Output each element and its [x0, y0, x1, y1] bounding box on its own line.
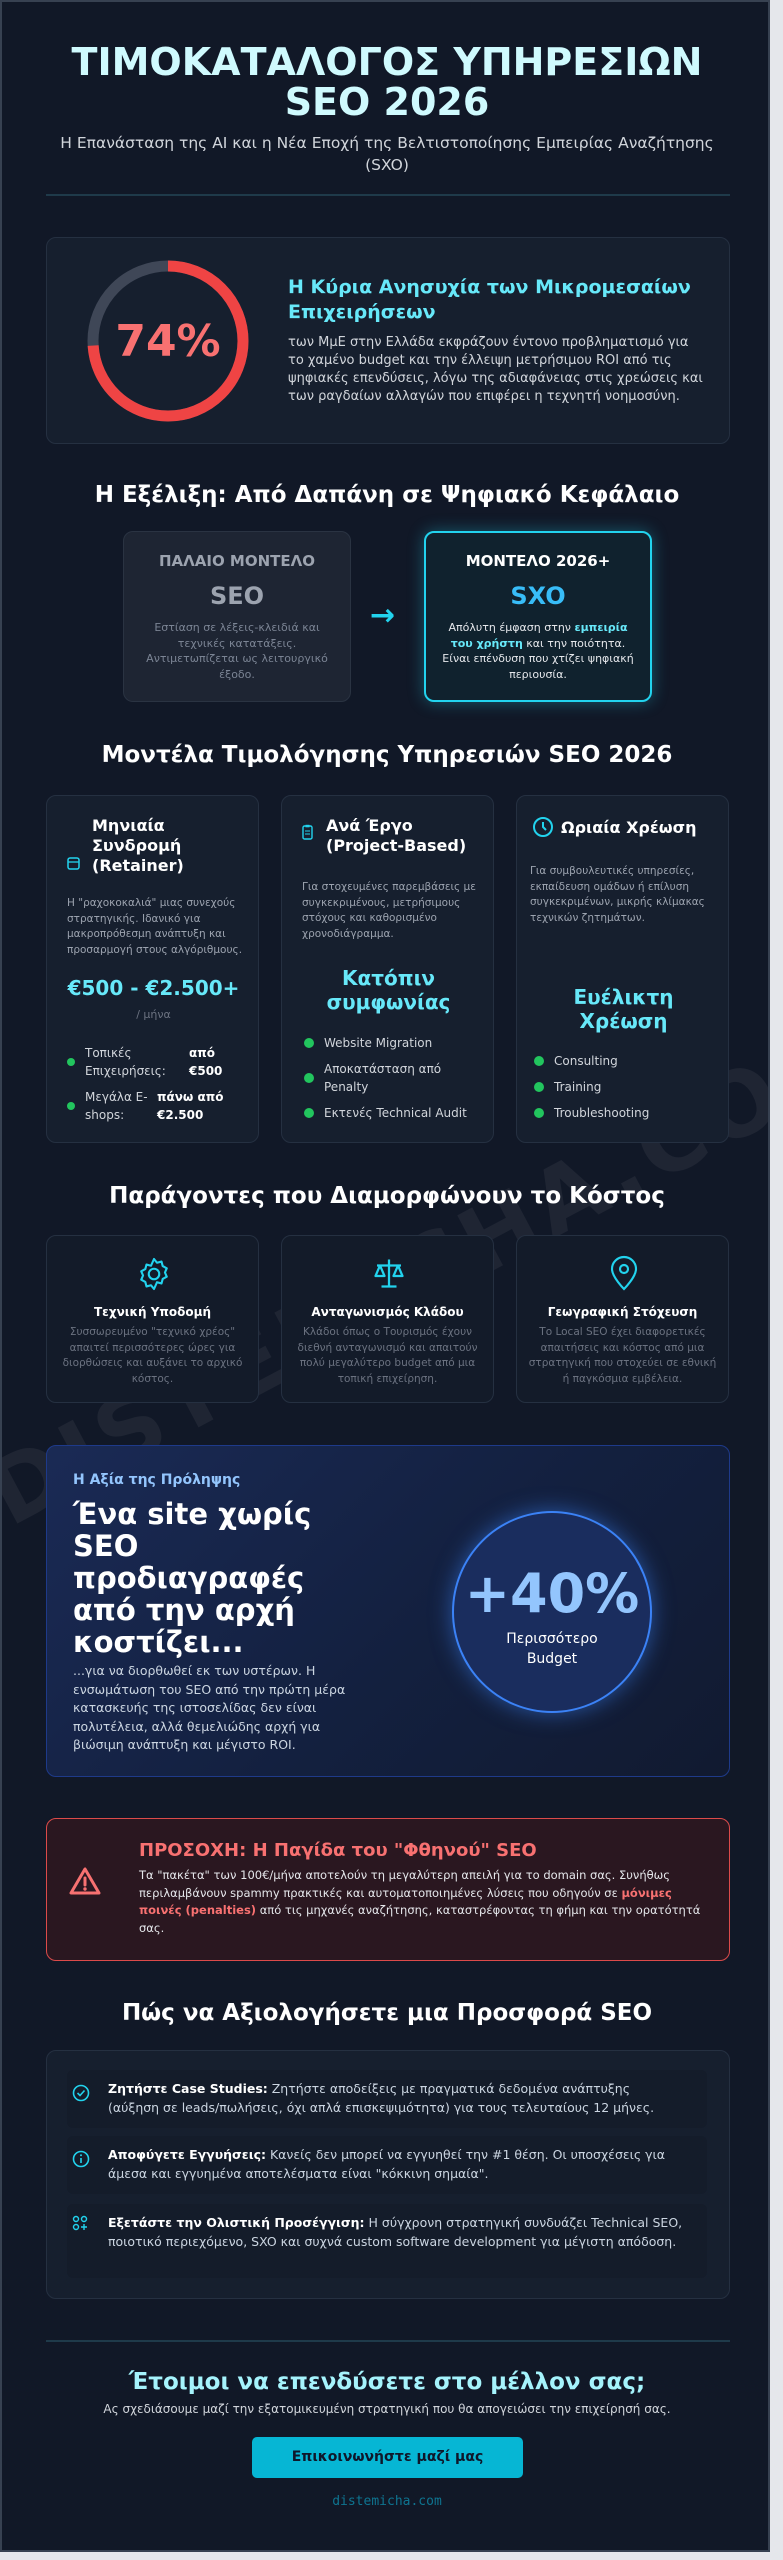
panel: project based: Κατόπιν	[342, 966, 435, 990]
panel: retainer: Μηνιαία	[92, 816, 165, 835]
panel: retainer: Μεγάλα E-shops:	[85, 1090, 148, 1122]
panel: warning	[46, 1818, 730, 1961]
panel: competition: Κλάδοι όπως ο Τουρισμός έχουν διεθνή ανταγωνισμό και απαιτούν πολύ μεγαλύτερο budget από μια τοπική επιχείρηση.	[298, 1326, 477, 1384]
panel: hourly: Ωριαία Χρέωση	[561, 818, 697, 837]
headline: Ένα site χωρίς SEO προδιαγραφές από την αρχή κοστίζει...	[73, 1497, 311, 1659]
panel: retainer: από	[189, 1046, 215, 1060]
panel: project based: συμφωνίας	[327, 990, 450, 1014]
panel: technical infrastructure: Συσσωρευμένο "τεχνικό χρέος" απαιτεί περισσότερες ώρες για διορθώσεις και αυξάνει το αρχικό κόστος.	[63, 1326, 242, 1384]
item: case studies: Ζητήστε Case Studies: Ζητήστε αποδείξεις με πραγματικά δεδομένα ανάπτυξης (αύξηση σε leads/πωλήσεις, όχι απλά επισκεψιμότητα) για τους τελευταίους 12 μήνες.	[108, 2081, 654, 2114]
heading: cost factors: Παράγοντες που Διαμορφώνουν το Κόστος	[109, 1183, 665, 1209]
text block: ...για να διορθωθεί εκ των υστέρων. Η ενσωμάτωση του SEO από την πρώτη μέρα κατασκευής της ιστοσελίδας δεν είναι πολυτέλεια, αλλά θεμελιώδης αρχή για βιώσιμη ανάπτυξη και μέγιστο ROI.	[73, 1663, 345, 1752]
panel: old model: Εστίαση σε λέξεις-κλειδιά και τεχνικές κατατάξεις. Αντιμετωπίζεται ως λειτουργικό έξοδο.	[146, 621, 328, 680]
label: Η Αξία της Πρόληψης	[73, 1472, 240, 1488]
panel: project based: Penalty	[324, 1080, 368, 1094]
icon: scales	[374, 1260, 404, 1288]
panel: project based: Ανά Έργο	[326, 816, 413, 835]
item: guarantees	[67, 2136, 707, 2194]
title: ΤΙΜΟΚΑΤΑΛΟΓΟΣ ΥΠΗΡΕΣΙΩΝ	[72, 40, 702, 84]
panel: project based: Αποκατάσταση από	[324, 1062, 441, 1076]
callout: +40% circle: Περισσότερο	[506, 1631, 598, 1647]
panel: evaluation checklist	[46, 2050, 730, 2299]
panel: project based: Website Migration	[324, 1036, 432, 1050]
panel: new model: ΜΟΝΤΕΛΟ 2026+	[466, 552, 610, 570]
item: holistic approach	[67, 2204, 707, 2278]
panel: retainer	[46, 795, 259, 1143]
panel: retainer: €2.500	[157, 1108, 203, 1122]
icon: warning triangle	[69, 1867, 100, 1894]
panel: geography	[516, 1235, 729, 1403]
panel: project based	[281, 795, 494, 1143]
subtitle: Η Επανάσταση της AI και η Νέα Εποχή της Βελτιστοποίησης Εμπειρίας Αναζήτησης (SXO)	[60, 134, 714, 174]
panel: competition	[281, 1235, 494, 1403]
icon: calendar	[67, 857, 80, 870]
title	[72, 40, 702, 124]
panel: warning: Τα "πακέτα" των 100€/μήνα αποτελούν τη μεγαλύτερη απειλή για το domain σας. Συνήθως περιλαμβάνουν spammy πρακτικές και αυτοματοποιημένες λύσεις που οδηγούν σε μόνιμες ποινές (penalties) από τις μηχανές αναζήτησης, καταστρέφοντας τη φήμη και την ορατότητά σας.	[139, 1868, 700, 1934]
icon: gear	[140, 1258, 168, 1290]
panel: hourly: Troubleshooting	[554, 1106, 649, 1120]
panel: new model: Απόλυτη έμφαση στην εμπειρία του χρήστη και την ποιότητα. Είναι επένδυση που χτίζει ψηφιακή περιουσία.	[442, 621, 634, 680]
chart: donut 74%	[88, 260, 248, 422]
panel: retainer: Τοπικές Επιχειρήσεις:	[85, 1046, 166, 1078]
panel: retainer: / μήνα	[136, 1008, 171, 1021]
panel: retainer: Συνδρομή	[92, 836, 181, 855]
panel: hourly: Ευέλικτη	[574, 985, 673, 1009]
panel: new model: SXO	[510, 582, 566, 610]
panel: old model	[123, 531, 351, 702]
panel: new model	[424, 531, 652, 702]
item: holistic approach: Εξετάστε την Ολιστική Προσέγγιση: Η σύγχρονη στρατηγική συνδυάζει Technical SEO, ποιοτικό περιεχόμενο, SXO και συχνά custom software development για μέγιστη απόδοση.	[108, 2215, 682, 2248]
CTA button	[252, 2437, 523, 2478]
panel: technical infrastructure: Τεχνική Υποδομή	[94, 1305, 211, 1319]
icon: clipboard	[302, 824, 313, 840]
panel: retainer: €500 - €2.500+	[68, 976, 239, 1000]
panel: project based: Εκτενές Technical Audit	[324, 1106, 467, 1120]
panel: old model: ΠΑΛΑΙΟ ΜΟΝΤΕΛΟ	[159, 552, 315, 570]
panel: prevention value	[46, 1445, 730, 1777]
panel: project based: Για στοχευμένες παρεμβάσεις με συγκεκριμένους, μετρήσιμους στόχους και καθορισμένο χρονοδιάγραμμα.	[302, 881, 476, 940]
panel: retainer: (Retainer)	[92, 856, 184, 875]
panel: hourly: Για συμβουλευτικές υπηρεσίες, εκπαίδευση ομάδων ή επίλυση συγκεκριμένων, μικρής κλίμακας τεχνικών ζητημάτων.	[530, 865, 705, 924]
heading: how to evaluate: Πώς να Αξιολογήσετε μια Προσφορά SEO	[122, 2000, 652, 2026]
panel: competition: Ανταγωνισμός Κλάδου	[311, 1305, 464, 1319]
text block: των ΜμΕ στην Ελλάδα εκφράζουν έντονο προβληματισμό για το χαμένο budget και την έλλειψη μετρήσιμου ROI από τις ψηφιακές επενδύσεις, λόγω της αδιαφάνειας στις χρεώσεις και των ραγδαίων αλλαγών που επιφέρει η τεχνητή νοημοσύνη.	[288, 335, 703, 404]
panel: warning: ΠΡΟΣΟΧΗ: Η Παγίδα του "Φθηνού" SEO	[139, 1840, 537, 1861]
icon: clock	[533, 817, 553, 837]
panel: 74% statistic	[46, 237, 730, 444]
CTA heading: Έτοιμοι να επενδύσετε στο μέλλον σας;	[129, 2369, 645, 2395]
callout: +40% circle: Budget	[527, 1651, 577, 1667]
panel: old model: SEO	[210, 582, 264, 610]
chart: donut 74%: 74%	[115, 316, 221, 367]
title: SEO 2026	[285, 80, 489, 124]
panel: geography: Γεωγραφική Στόχευση	[548, 1305, 697, 1319]
CTA text: Ας σχεδιάσουμε μαζί την εξατομικευμένη στρατηγική που θα απογειώσει την επιχείρησή σας.	[103, 2402, 671, 2416]
callout: +40% circle	[452, 1511, 652, 1713]
panel: hourly	[516, 795, 729, 1143]
panel: hourly: Training	[554, 1080, 601, 1094]
panel: hourly: Consulting	[554, 1054, 618, 1068]
panel: project based: (Project-Based)	[326, 836, 466, 855]
panel: retainer: πάνω από	[157, 1090, 224, 1104]
panel: hourly: Χρέωση	[579, 1009, 668, 1033]
callout: +40% circle: +40%	[465, 1562, 639, 1625]
CTA button: Επικοινωνήστε μαζί μας	[292, 2449, 483, 2465]
heading: pricing models: Μοντέλα Τιμολόγησης Υπηρεσιών SEO 2026	[102, 742, 672, 768]
item: guarantees: Αποφύγετε Εγγυήσεις: Κανείς δεν μπορεί να εγγυηθεί την #1 θέση. Οι υποσχέσεις για άμεσα και εγγυημένα αποτελέσματα είναι "κόκκινη σημαία".	[108, 2147, 665, 2180]
heading: Η Κύρια Ανησυχία των Μικρομεσαίων Επιχειρήσεων	[288, 276, 691, 323]
panel: technical infrastructure	[46, 1235, 259, 1403]
domain: distemicha.com	[332, 2494, 442, 2509]
panel: retainer: Η "ραχοκοκαλιά" μιας συνεχούς στρατηγικής. Ιδανικό για μακροπρόθεσμη ανάπτυξη και προσαρμογή στους αλγόριθμους.	[67, 897, 242, 956]
arrow: →	[370, 598, 395, 633]
panel: retainer: €500	[189, 1064, 222, 1078]
heading: evolution: Η Εξέλιξη: Από Δαπάνη σε Ψηφιακό Κεφάλαιο	[95, 482, 679, 508]
item: case studies	[67, 2070, 707, 2128]
icon: map pin	[610, 1256, 638, 1290]
panel: geography: Το Local SEO έχει διαφορετικές απαιτήσεις και κόστος από μια στρατηγική που στοχεύει σε εθνική ή παγκόσμια εμβέλεια.	[529, 1326, 716, 1384]
